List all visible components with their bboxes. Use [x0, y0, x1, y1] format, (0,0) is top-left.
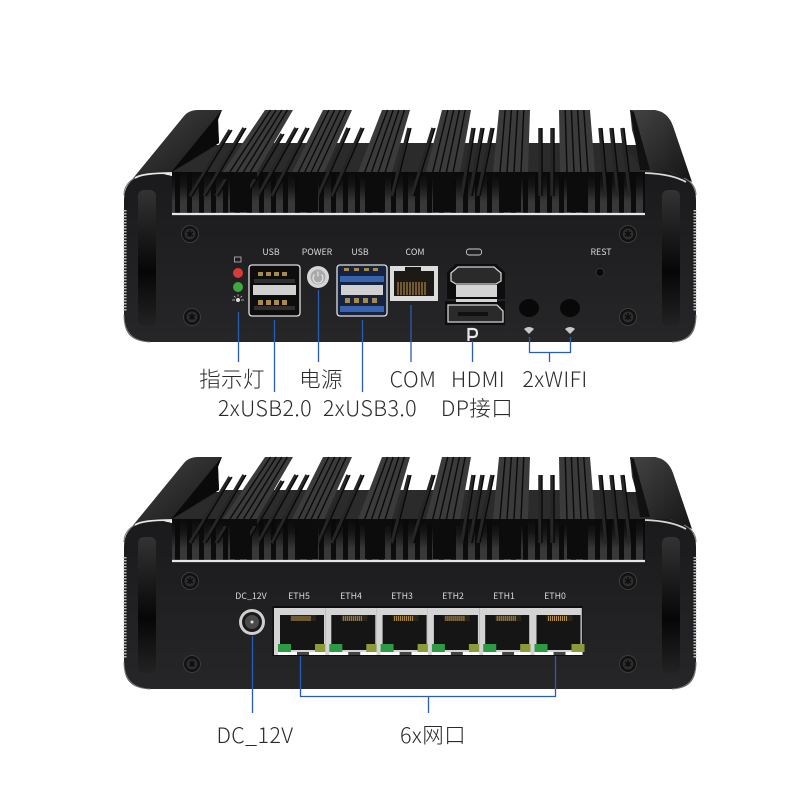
callout labels: top device: 指示灯 [199, 363, 265, 394]
callout lines: bottom device [252, 636, 556, 713]
reset pinhole: REST [590, 245, 612, 258]
icon: DP logo [468, 328, 477, 341]
port: DC 12V jack [235, 589, 268, 635]
callout labels: top device: 2xWIFI [522, 363, 588, 394]
button: power [302, 245, 333, 288]
chassis with heatsink [124, 457, 696, 689]
ports: ETH5 to ETH0: ETH0 [544, 589, 566, 602]
button: power: POWER [302, 245, 333, 258]
callout labels: bottom device: 6x网口 [400, 719, 466, 750]
ports: ETH5 to ETH0: ETH4 [340, 589, 362, 602]
device: rear I/O panel with USB, HDMI, COM [124, 110, 696, 342]
chassis with heatsink [124, 110, 696, 342]
callout labels: top device: COM [390, 363, 436, 394]
port: dual USB 3.0: USB [351, 245, 369, 258]
LED indicators [232, 257, 244, 302]
reset pinhole [590, 245, 612, 276]
ports: ETH5 to ETH0 [272, 589, 584, 656]
callout labels: top device: HDMI [451, 363, 505, 394]
port: COM [390, 245, 438, 301]
callout labels: bottom device: DC_12V [216, 719, 294, 750]
wifi antenna holes [519, 299, 580, 334]
port: dual USB 2.0 [249, 245, 300, 316]
callout labels: top device: 2xUSB2.0 [218, 392, 312, 423]
callout labels: bottom device [216, 719, 466, 750]
port: DC 12V jack: DC_12V [235, 589, 268, 602]
ports: ETH5 to ETH0: ETH3 [391, 589, 413, 602]
port: COM: COM [405, 245, 425, 258]
ports: ETH5 to ETH0: ETH2 [442, 589, 464, 602]
callout labels: top device [199, 363, 588, 423]
port: dual USB 3.0 [337, 245, 387, 316]
ports: ETH5 to ETH0: ETH5 [288, 589, 310, 602]
callout labels: top device: DP接口 [441, 392, 513, 423]
device: rear panel with six Ethernet ports [124, 457, 696, 689]
callout labels: top device: 2xUSB3.0 [323, 392, 417, 423]
port: dual USB 2.0: USB [262, 245, 280, 258]
callout lines: top device [238, 290, 570, 392]
callout labels: top device: 电源 [299, 363, 343, 394]
port: HDMI and DisplayPort [445, 249, 505, 341]
icon: HDMI mini connector [466, 249, 482, 255]
ports: ETH5 to ETH0: ETH1 [493, 589, 515, 602]
